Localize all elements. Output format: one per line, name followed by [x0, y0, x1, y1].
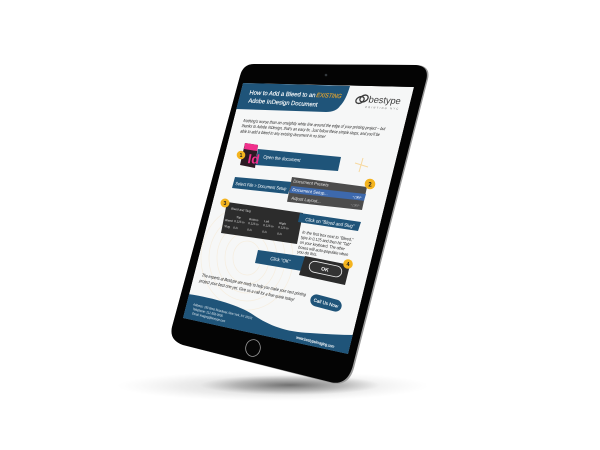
bleed and slug dialog: 0 in — [277, 232, 283, 236]
footer contact details: Telephone: 212-555-0000 — [192, 307, 223, 318]
badge 2 — [365, 179, 375, 189]
intro paragraph — [240, 118, 387, 139]
step 3 instructions: boxes will auto-populate when — [298, 245, 350, 257]
badge 3: 3 — [224, 201, 227, 207]
call us now button: Call Us Now — [313, 298, 339, 309]
footer wave — [182, 294, 356, 356]
icon: InDesign file — [240, 143, 261, 168]
document menu: Adjust Layout... — [291, 196, 322, 204]
bleed and slug dialog: 0.125 in — [263, 223, 274, 228]
step 1 bar — [255, 149, 341, 171]
step 1 label: Open the document — [262, 155, 302, 164]
background concentric rings — [201, 206, 293, 310]
badge 1 — [237, 151, 245, 159]
badge 4 — [343, 259, 353, 269]
document menu: ⌥⌘P — [352, 195, 362, 200]
bleed and slug dialog: Top — [236, 215, 242, 220]
title — [248, 90, 342, 107]
step 3 instructions: you do this. — [297, 249, 318, 257]
Bestype logo: PRINTING NYC — [365, 105, 399, 111]
bleed and slug dialog: Left — [264, 219, 270, 224]
step 3 label: Click on "Bleed and Slug" — [304, 217, 355, 230]
bleed and slug dialog: Right — [279, 221, 287, 226]
home button — [244, 338, 262, 358]
title: How to Add a Bleed to an — [248, 90, 317, 99]
document menu: ⌥⌘P — [350, 203, 360, 208]
title: Adobe InDesign Document — [247, 98, 319, 109]
intro paragraph: Nothing's worse than an unsightly white line around the edge of your printing project – but — [243, 118, 387, 131]
bleed and slug dialog: 0 in — [262, 230, 268, 234]
step 2 label: Select File > Document Setup — [235, 181, 287, 191]
Bestype logo — [355, 94, 402, 111]
bleed and slug dialog: 0 in — [233, 226, 239, 230]
intro paragraph: thanks to Adobe InDesign, that's an easy fix. Just follow these simple steps, and you'll be — [241, 123, 381, 137]
document menu: Document Setup... — [292, 187, 329, 196]
bleed and slug dialog: Slug — [224, 224, 231, 229]
step 3 instructions: type in 0.125 and then hit "Tab" — [300, 235, 352, 247]
OK button — [308, 260, 343, 278]
step 4 bar — [255, 250, 308, 271]
OK dialog — [299, 256, 350, 285]
step 3 bar — [298, 213, 361, 231]
badge 1: 1 — [240, 153, 243, 159]
bleed and slug dialog: Bleed — [225, 218, 234, 223]
logo wordmark: bestype — [367, 95, 402, 106]
screen — [182, 83, 414, 356]
bleed and slug dialog: Bottom — [249, 217, 259, 222]
badge 2: 2 — [368, 182, 372, 188]
step 2 bar — [232, 177, 292, 194]
icon: InDesign file: Id — [246, 151, 261, 167]
step 3 instructions: In the first box next to "Bleed," — [302, 230, 354, 242]
logo mark — [355, 94, 369, 104]
call us now button — [310, 294, 342, 312]
step 3 instructions — [297, 230, 354, 257]
bleed and slug dialog: 0.125 in — [278, 225, 289, 230]
camera — [325, 74, 327, 76]
footer contact details: Email: imaging@bestype.com — [192, 312, 226, 323]
bleed and slug dialog: 0.125 in — [248, 221, 259, 226]
highlighted row — [289, 186, 366, 201]
drop shadow under tablet — [117, 371, 429, 401]
tablet mockup infographic — [150, 64, 428, 398]
bleed and slug dialog: 0 in — [247, 228, 253, 232]
bleed and slug dialog: Bleed and Slug — [231, 207, 252, 213]
intro paragraph: able to add a bleed to any existing document in no time! — [240, 129, 327, 139]
closing paragraph: project your best one yet. Give us a call for a free quote today! — [198, 278, 296, 302]
document menu: Document Presets — [293, 179, 330, 188]
bleed and slug dialog: 0.125 in — [234, 219, 245, 224]
document menu — [287, 177, 367, 210]
step 3 instructions: on your keyboard. The other — [299, 240, 346, 251]
bleed and slug dialog — [221, 202, 303, 244]
footer website: www.bestypeimaging.com — [296, 335, 335, 349]
title: EXISTING — [315, 92, 342, 100]
badge 3 — [220, 198, 230, 208]
footer contact details: Address: 280 West Broadway, New York, NY 10013 — [193, 303, 253, 320]
header banner — [236, 83, 350, 112]
OK dialog: OK — [321, 266, 329, 274]
decorative plus — [355, 158, 368, 172]
step 4 label: Click "OK" — [269, 256, 291, 265]
tablet body — [171, 64, 429, 384]
closing paragraph: The experts at Bestype are ready to help you make your next printing — [201, 273, 307, 297]
badge 4: 4 — [346, 262, 350, 268]
